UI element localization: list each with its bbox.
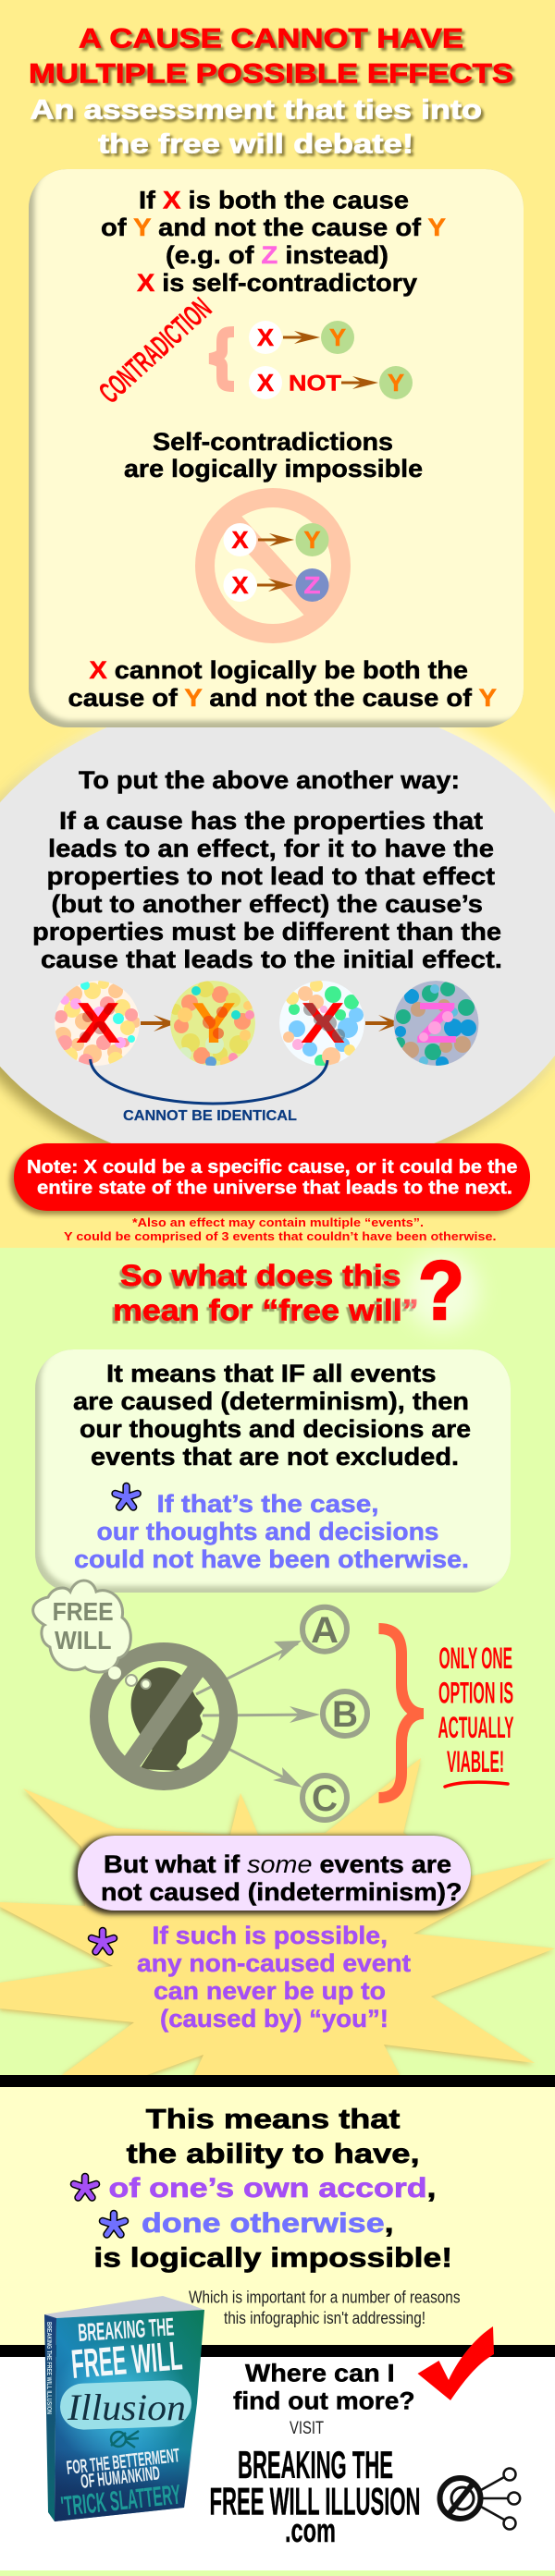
gray ellipse panel: put another way xyxy=(0,687,555,1182)
bottom green strip xyxy=(0,2570,555,2576)
section background: cream xyxy=(0,2075,555,2345)
icon: prohibition sign over causes: Z xyxy=(303,571,321,599)
panel: determinism xyxy=(35,1342,524,1593)
text: self-contradictions: are logically impossible xyxy=(124,455,423,482)
thought cloud: free will: FREE xyxy=(53,1597,114,1626)
black divider band xyxy=(0,2075,555,2087)
diagram: X causes Y: X xyxy=(257,324,275,351)
text: it means: our thoughts and decisions are xyxy=(80,1415,471,1443)
text: to put the above another way: To put the above another way: xyxy=(79,766,460,794)
text: this means that xyxy=(93,2105,452,2274)
diagram: X causes Y xyxy=(249,321,354,354)
callout: note: Note: X could be a specific cause, or it could be the xyxy=(27,1157,518,1178)
text: visit: VISIT xyxy=(290,2419,324,2438)
option C: C xyxy=(312,1778,338,1819)
text: where can I find out more xyxy=(233,2360,414,2415)
icon: blue asterisk xyxy=(103,2214,125,2235)
icon: book: FOR THE BETTERMENT xyxy=(66,2445,181,2479)
icon: book: BREAKING THE FREE WILL ILLUSION xyxy=(45,2322,52,2414)
icon: book: OF HUMANKIND xyxy=(80,2462,161,2493)
footnote xyxy=(64,1215,496,1243)
icon: question mark: ? xyxy=(418,1245,464,1337)
option C xyxy=(302,1776,347,1820)
text: properties paragraph: leads to an effect, for it to have the xyxy=(48,835,494,862)
text: if that's the case: our thoughts and decisions xyxy=(96,1518,438,1545)
heading: so what does this mean: mean for “free will” xyxy=(113,1294,419,1327)
option A xyxy=(302,1607,347,1652)
panel: indeterminism question: not caused (indeterminism)? xyxy=(101,1878,462,1906)
diagram: dotted cause X: X xyxy=(76,992,120,1056)
diagram: dotted cause X alternate xyxy=(279,979,364,1068)
text: properties paragraph: properties must be different than the xyxy=(32,918,501,946)
arrow xyxy=(141,1015,177,1032)
arrow xyxy=(365,1015,401,1032)
text: which is important xyxy=(189,2289,461,2327)
icon: prohibition sign over causes xyxy=(205,497,340,634)
diagram: dotted cause X alternate: X xyxy=(301,992,345,1056)
footnote: *Also an effect may contain multiple “events”. xyxy=(132,1215,424,1229)
diagram: X not causes Y: Y xyxy=(388,369,404,397)
option B xyxy=(323,1691,367,1736)
text: it means: are caused (determinism), then xyxy=(73,1387,469,1415)
arrows to options xyxy=(196,1641,320,1788)
text: if X is both: (e.g. of Z instead) xyxy=(166,241,388,269)
diagram: X not causes Y: NOT xyxy=(289,372,341,396)
heading: so what does this mean xyxy=(113,1259,419,1327)
subtitle: An assessment that ties into xyxy=(30,94,482,125)
title: A CAUSE CANNOT HAVE xyxy=(79,24,463,55)
option A: A xyxy=(311,1610,339,1651)
panel: indeterminism question: But what if some events are xyxy=(104,1850,451,1878)
icon: red check mark xyxy=(418,2326,494,2400)
text: if X is both xyxy=(101,186,446,297)
heading: so what does this mean: So what does this xyxy=(120,1259,401,1292)
text: properties paragraph: (but to another effect) the cause’s xyxy=(52,890,483,918)
icon: prohibition ring xyxy=(99,1652,228,1781)
text: properties paragraph: properties to not lead to that effect xyxy=(46,862,495,890)
icon: prohibition sign over causes: Y xyxy=(303,526,320,554)
callout: note: entire state of the universe that leads to the next. xyxy=(37,1178,512,1199)
text: if that's the case: could not have been otherwise. xyxy=(74,1545,469,1573)
text: self-contradictions: Self-contradictions xyxy=(153,428,393,456)
text: if X is both: X is self-contradictory xyxy=(137,269,417,297)
text: if X is both: of Y and not the cause of Y xyxy=(101,214,446,241)
label: contradiction: CONTRADICTION xyxy=(92,291,217,409)
text: this means that: the ability to have, xyxy=(127,2139,420,2169)
text: this means that: This means that xyxy=(146,2105,400,2135)
starburst background xyxy=(0,1758,555,2077)
text: where can I find out more: Where can I xyxy=(245,2360,395,2387)
icon: book: 'TRICK SLATTERY xyxy=(59,2480,182,2522)
panel: indeterminism question xyxy=(74,1836,471,1914)
text: if that's the case xyxy=(74,1490,469,1573)
text: conclusion: X cannot logically be both the xyxy=(89,656,468,684)
title: MULTIPLE POSSIBLE EFFECTS xyxy=(29,58,513,89)
footnote: Y could be comprised of 3 events that couldn’t have been otherwise. xyxy=(64,1229,496,1243)
text: it means: events that are not excluded. xyxy=(91,1443,459,1471)
diagram: X causes Y: Y xyxy=(329,324,346,351)
text: site name: .com xyxy=(285,2511,336,2549)
brace: orange xyxy=(379,1629,424,1798)
diagram: dotted cause X xyxy=(55,978,141,1068)
icon: prohibition sign over causes: X xyxy=(231,526,249,554)
diagram: dotted effect Y: Y xyxy=(191,992,236,1056)
text: if such is possible: any non-caused event xyxy=(137,1949,411,1977)
label: cannot be identical: CANNOT BE IDENTICAL xyxy=(123,1108,297,1124)
thought cloud: free will xyxy=(33,1581,151,1689)
diagram: dotted effect Y xyxy=(170,981,255,1069)
black divider band xyxy=(0,2345,555,2357)
text: if such is possible: can never be up to xyxy=(154,1977,386,2005)
text: this means that: is logically impossible! xyxy=(93,2243,452,2274)
text: where can I find out more: find out more? xyxy=(233,2387,414,2415)
text: it means: It means that IF all events xyxy=(106,1360,437,1387)
subtitle xyxy=(30,94,482,160)
text: site name xyxy=(209,2443,420,2549)
diagram: X not causes Y: X xyxy=(257,369,275,397)
icon: question mark xyxy=(405,1245,479,1337)
icon: prohibition sign over causes: X xyxy=(231,571,249,599)
text: site name: BREAKING THE xyxy=(238,2443,393,2486)
option B: B xyxy=(332,1694,358,1735)
text: if such is possible: If such is possible, xyxy=(152,1922,388,1949)
subtitle: the free will debate! xyxy=(98,129,413,160)
icon: book: FREE WILL xyxy=(69,2333,184,2387)
icon: purple asterisk xyxy=(92,1931,114,1952)
diagram: dotted effect Z: Z xyxy=(415,992,458,1056)
icon: book: Illusion xyxy=(67,2387,186,2428)
icon: purple asterisk xyxy=(74,2177,96,2198)
callout: note xyxy=(10,1143,530,1215)
icon: blue asterisk xyxy=(116,1486,138,1507)
icon: book xyxy=(44,2296,204,2522)
text: if that's the case: If that’s the case, xyxy=(157,1490,379,1518)
thought cloud: free will: WILL xyxy=(55,1626,111,1654)
brace: pink xyxy=(210,332,234,386)
section background: green xyxy=(0,1248,555,2075)
section background: yellow xyxy=(0,0,555,1248)
diagram: X not causes Y xyxy=(249,366,413,399)
text: self-contradictions xyxy=(124,428,423,482)
text: which is important: Which is important for a number of reasons xyxy=(189,2289,461,2307)
label: only one option is actually viable xyxy=(438,1642,514,1787)
text: if such is possible: (caused by) “you”! xyxy=(160,2005,388,2033)
text: if X is both: If X is both the cause xyxy=(139,186,409,214)
icon: head silhouette xyxy=(131,1667,204,1771)
text: this means that: done otherwise , xyxy=(142,2208,394,2239)
text: conclusion: cause of Y and not the cause of Y xyxy=(68,684,497,712)
text: which is important: this infographic isn't addressing! xyxy=(224,2309,426,2327)
text: properties paragraph xyxy=(32,807,502,973)
text: this means that: of one’s own accord , xyxy=(109,2173,437,2204)
connector curve xyxy=(91,1059,327,1104)
icon: logo xyxy=(440,2468,520,2529)
diagram: dotted effect Z xyxy=(394,981,479,1069)
text: it means xyxy=(73,1360,471,1471)
section background: white footer xyxy=(0,2345,555,2570)
text: properties paragraph: cause that leads to the initial effect. xyxy=(41,946,502,973)
panel: contradiction explanation xyxy=(29,161,538,727)
diagram: person with three options xyxy=(33,1581,513,1820)
text: conclusion xyxy=(68,656,497,712)
icon: book: BREAKING THE xyxy=(77,2313,175,2347)
text: properties paragraph: If a cause has the properties that xyxy=(59,807,483,835)
text: if such is possible xyxy=(137,1922,411,2033)
title xyxy=(29,24,513,89)
